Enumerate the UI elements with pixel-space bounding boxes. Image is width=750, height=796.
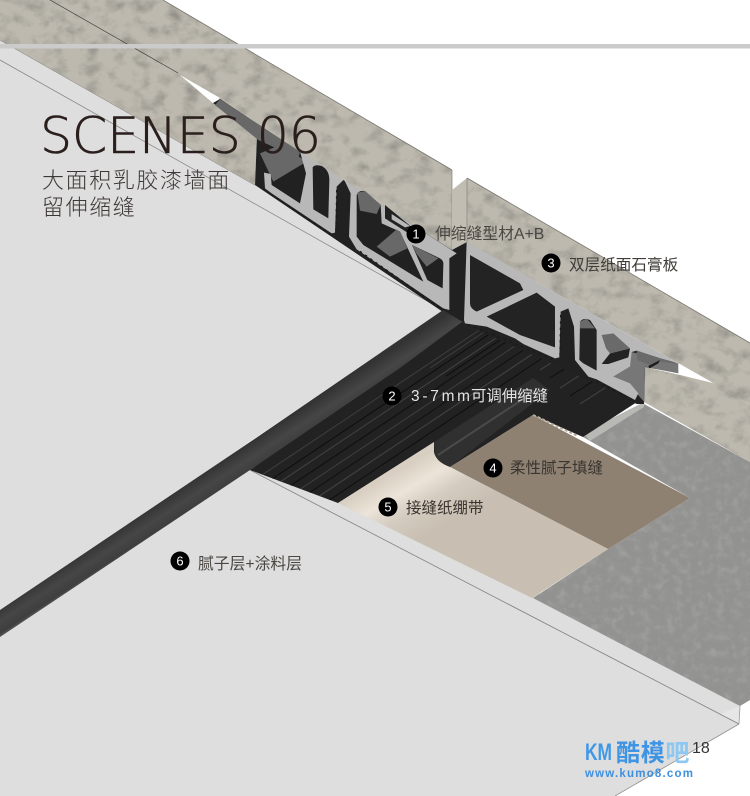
label 5: joint tape [378, 498, 484, 517]
label 6: putty and paint layer [170, 552, 302, 573]
subtitle: 留伸缩缝 [42, 195, 136, 220]
profile A pockets [313, 165, 443, 288]
profile B light face [464, 242, 678, 400]
panel: gypsum board lower sheet, left [0, 0, 257, 185]
label 3: double gypsum board: 3 [547, 256, 555, 270]
profile B pockets [470, 255, 630, 371]
profile A inner shaded face [215, 99, 307, 182]
label 5: joint tape: 接缝纸绷带 [406, 499, 484, 517]
panel: gypsum board upper sheet, right [452, 178, 750, 405]
profile A small bar [392, 214, 410, 227]
label 4: flexible putty: 4 [489, 460, 497, 476]
label 2: adjustable joint: 可调伸缩缝 [471, 387, 548, 405]
label 4: flexible putty: 柔性腻子填缝 [510, 459, 603, 477]
watermark: 酷模吧 [616, 740, 690, 767]
joint: dark trim strip [0, 310, 466, 637]
aluminium expansion profile B [464, 242, 678, 402]
joint: dark underlay behind profiles [213, 99, 678, 404]
subtitle [42, 168, 231, 220]
joint: 3-7mm adjustable grooves [250, 322, 636, 503]
profile B groove and serrations [468, 315, 635, 401]
profile A light face [264, 152, 457, 310]
subtitle: 大面积乳胶漆墙面 [42, 168, 231, 193]
profile B pocket shading [580, 319, 678, 367]
watermark: KM [585, 739, 612, 766]
label 6: putty and paint layer: 6 [176, 554, 184, 568]
label 6: putty and paint layer: 腻子层+涂料层 [198, 555, 302, 573]
label 5: joint tape: 5 [384, 500, 392, 514]
panel: upper-left putty and paint wall [0, 40, 443, 612]
top rule [0, 44, 750, 48]
label 4: flexible putty [484, 458, 603, 478]
aluminium expansion profile A [215, 99, 457, 310]
watermark [584, 739, 693, 780]
label 3: double gypsum board [542, 254, 679, 274]
label 3: double gypsum board: 双层纸面石膏板 [569, 256, 679, 274]
panel: concrete base [533, 402, 750, 706]
profile A pocket shading [357, 191, 438, 267]
label 2: adjustable joint: 2 [388, 388, 396, 404]
profile B end fin [648, 360, 660, 368]
profile A serrated edge [272, 190, 443, 310]
joint paper tape [338, 442, 608, 598]
white gaps between board sheets [180, 75, 713, 383]
panel: gypsum board lower sheet, right [644, 367, 750, 462]
label 2: adjustable joint: 3-7mm [411, 388, 470, 405]
profile B end underlay [613, 352, 678, 402]
page number: 18 [692, 740, 710, 757]
label 1: expansion profile: 1 [412, 226, 420, 242]
panel: gypsum board upper sheet, left [50, 0, 452, 250]
panel: lower putty and paint wall [0, 467, 740, 796]
label 1: expansion profile: 伸缩缝型材A+B [435, 225, 544, 243]
flexible putty filler [450, 415, 690, 549]
label 2: adjustable joint [382, 386, 548, 406]
title: SCENES 06 [40, 107, 321, 165]
watermark: www.kumo8.com [584, 768, 693, 780]
